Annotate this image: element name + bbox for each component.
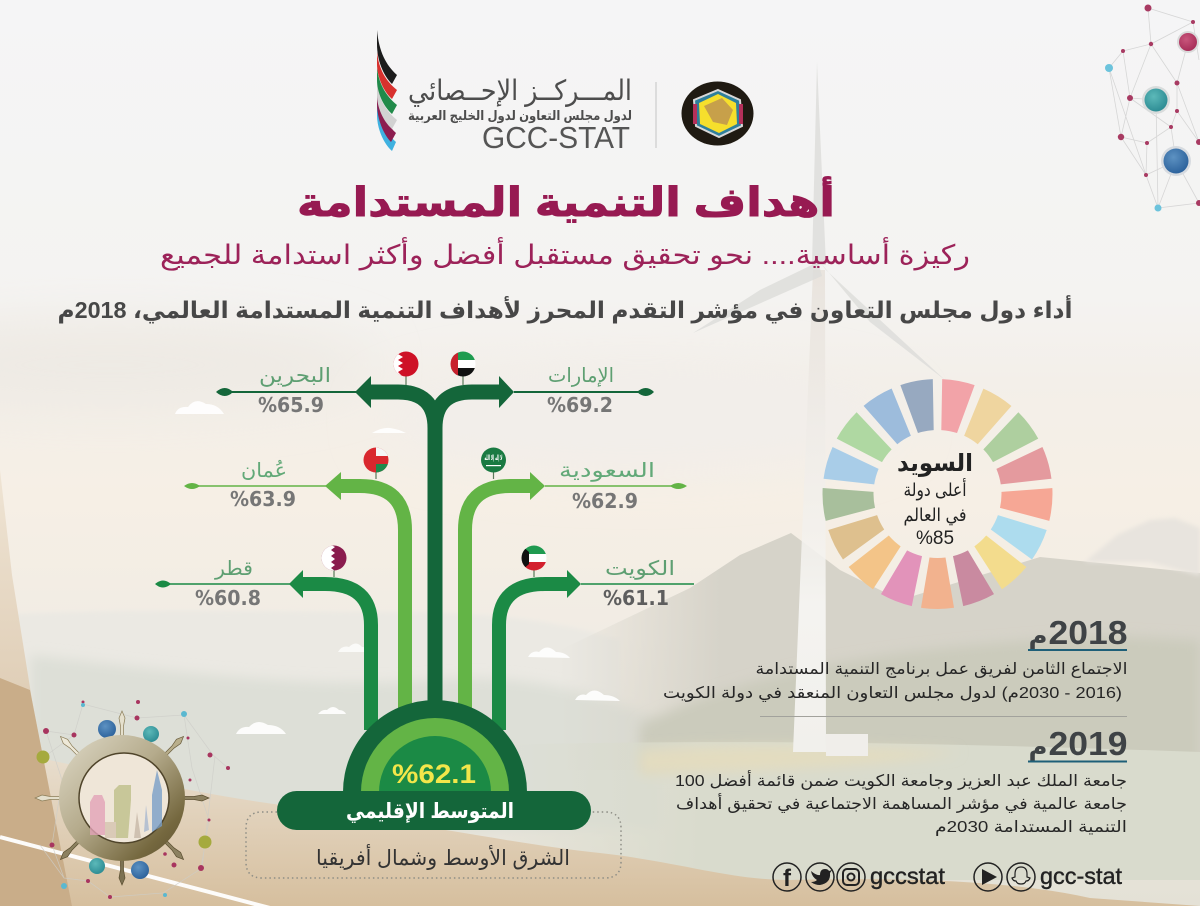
- callout: region: [246, 812, 621, 878]
- label: Bahrain: البحرين: [259, 365, 331, 387]
- callout: region: الشرق الأوسط وشمال أفريقيا: [316, 844, 570, 870]
- wheel centre text: أعلى دولة: [904, 478, 966, 501]
- label: Bahrain: %65.9: [258, 393, 324, 417]
- regional average gauge: المتوسط الإقليمي: [346, 800, 514, 823]
- wind turbine: [693, 62, 945, 756]
- logo: ribbon: [377, 30, 397, 151]
- wheel centre text: [897, 450, 973, 549]
- icon: twitter: [806, 863, 834, 891]
- icon: facebook: f: [783, 865, 792, 892]
- icon: instagram: [837, 863, 865, 891]
- label: Qatar: [195, 558, 261, 610]
- milestone: 2019: جامعة الملك عبد العزيز وجامعة الكويت ضمن قائمة أفضل 100: [675, 770, 1127, 791]
- title: أهداف التنمية المستدامة: [297, 176, 835, 225]
- chart heading: أداء دول مجلس التعاون في مؤشر التقدم المحرز لأهداف التنمية المستدامة العالمي، 2018م: [57, 294, 1072, 324]
- network decoration: bottom left: [36, 700, 230, 899]
- flag: Oman: [363, 447, 389, 473]
- logo: wordmark: GCC-STAT: [482, 120, 630, 155]
- milestone: 2019: التنمية المستدامة 2030م: [935, 819, 1127, 836]
- ship wheel illustration: [35, 711, 209, 885]
- label: Saudi Arabia: [559, 460, 655, 513]
- label: Oman: [230, 459, 296, 511]
- label: Qatar: %60.8: [195, 586, 261, 610]
- milestone: 2018: الاجتماع الثامن لفريق عمل برنامج التنمية المستدامة: [756, 661, 1128, 679]
- regional average gauge: %62.1: [392, 759, 476, 789]
- icon: snapchat: [1007, 863, 1035, 891]
- label: Oman: %63.9: [230, 487, 296, 511]
- branch: dark trunk: [370, 392, 500, 720]
- label: Kuwait: [603, 558, 675, 610]
- milestone: 2019: 2019: [1048, 725, 1128, 762]
- branch: light green arms: [338, 486, 533, 720]
- icon: GCC emblem: [682, 82, 754, 146]
- leader lines and leaves: [155, 376, 694, 588]
- icon: facebook: [773, 863, 801, 892]
- milestone: 2018: 2018: [1048, 614, 1128, 651]
- flag: Kuwait: [521, 545, 547, 571]
- milestone: 2018: [663, 614, 1128, 703]
- logo: wordmark: لدول مجلس التعاون لدول الخليج العربية: [408, 108, 632, 123]
- branch: low green arms: [300, 584, 570, 730]
- small clouds: [175, 401, 620, 734]
- logo: wordmark: المـــركــز الإحــصائي: [408, 75, 632, 107]
- label: Kuwait: %61.1: [603, 586, 669, 610]
- SDG wheel: [821, 378, 1054, 609]
- label: UAE: [547, 365, 614, 417]
- milestone: 2018: م: [1028, 623, 1048, 650]
- milestone: 2019: م: [1028, 734, 1048, 761]
- label: UAE: %69.2: [547, 393, 613, 417]
- wheel handles: [35, 711, 209, 885]
- network decoration: top right: [1105, 4, 1200, 212]
- wheel centre text: في العالم: [904, 505, 966, 526]
- handle: gccstat: gccstat: [870, 863, 946, 889]
- flag: Bahrain: [393, 351, 419, 377]
- label: Saudi Arabia: %62.9: [572, 489, 638, 513]
- social media: [773, 863, 1123, 892]
- regional average gauge: [277, 700, 591, 830]
- icon: youtube: [974, 863, 1002, 891]
- label: Saudi Arabia: السعودية: [559, 460, 655, 482]
- flag: UAE: [450, 351, 476, 377]
- label: Oman: عُمان: [241, 459, 287, 482]
- wheel centre text: %85: [916, 528, 954, 549]
- city skyline: [90, 770, 162, 838]
- logo: wordmark: [408, 75, 632, 155]
- label: Bahrain: [258, 365, 331, 417]
- flag: Saudi Arabia: [481, 448, 506, 472]
- handle: gcc-stat: gcc-stat: [1040, 863, 1123, 889]
- wheel centre text: السويد: [897, 450, 973, 477]
- label: UAE: الإمارات: [548, 365, 614, 387]
- milestone: 2019: جامعة عالمية في مؤشر المساهمة الاجتماعية في تحقيق أهداف: [676, 793, 1127, 814]
- label: Qatar: قطر: [214, 558, 253, 580]
- subtitle: ركيزة أساسية.... نحو تحقيق مستقبل أفضل وأكثر استدامة للجميع: [160, 236, 970, 271]
- label: Kuwait: الكويت: [605, 558, 675, 580]
- flag: Qatar: [321, 545, 347, 571]
- milestone: 2018: (2016 - 2030م) لدول مجلس التعاون المنعقد في دولة الكويت: [663, 685, 1122, 703]
- flag: Saudi Arabia: لا إله إلا الله: [484, 455, 502, 462]
- milestone: 2019: [675, 725, 1128, 836]
- tree chart: [155, 351, 694, 730]
- arrowheads: [289, 376, 581, 598]
